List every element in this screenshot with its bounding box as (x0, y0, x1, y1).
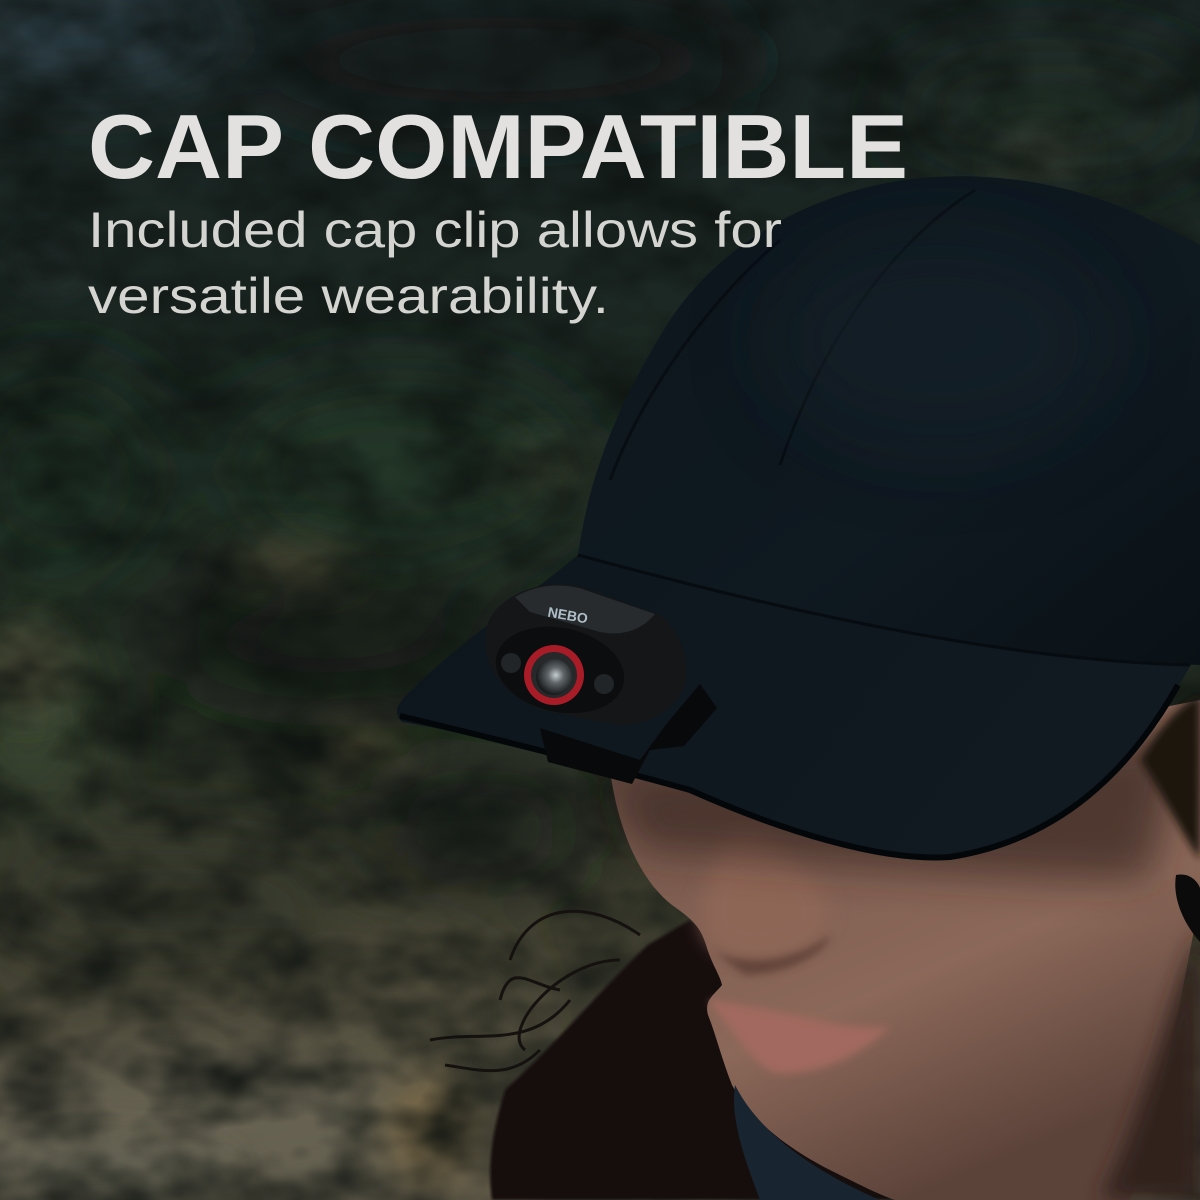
lips (708, 1000, 890, 1073)
headlamp clip (540, 684, 717, 784)
nose shadow (712, 935, 830, 975)
neck shadow (1100, 930, 1200, 1200)
title: CAP COMPATIBLE (88, 97, 908, 198)
headlamp buttons (501, 653, 614, 694)
subtitle (88, 202, 782, 324)
headlamp logo: NEBO (547, 604, 589, 626)
cap shadow on face (612, 740, 1180, 880)
subtitle: Included cap clip allows for (88, 202, 782, 258)
subtitle: versatile wearability. (88, 268, 609, 324)
person: face (610, 700, 1200, 1200)
hair at temple and collar (734, 695, 1200, 1200)
cap crown (578, 176, 1200, 665)
icon: NEBO headlamp (485, 584, 717, 784)
cap brim (397, 555, 1200, 858)
hair (430, 911, 960, 1200)
headlamp body (485, 584, 686, 725)
headlamp lens (524, 645, 584, 705)
nose (703, 825, 827, 956)
